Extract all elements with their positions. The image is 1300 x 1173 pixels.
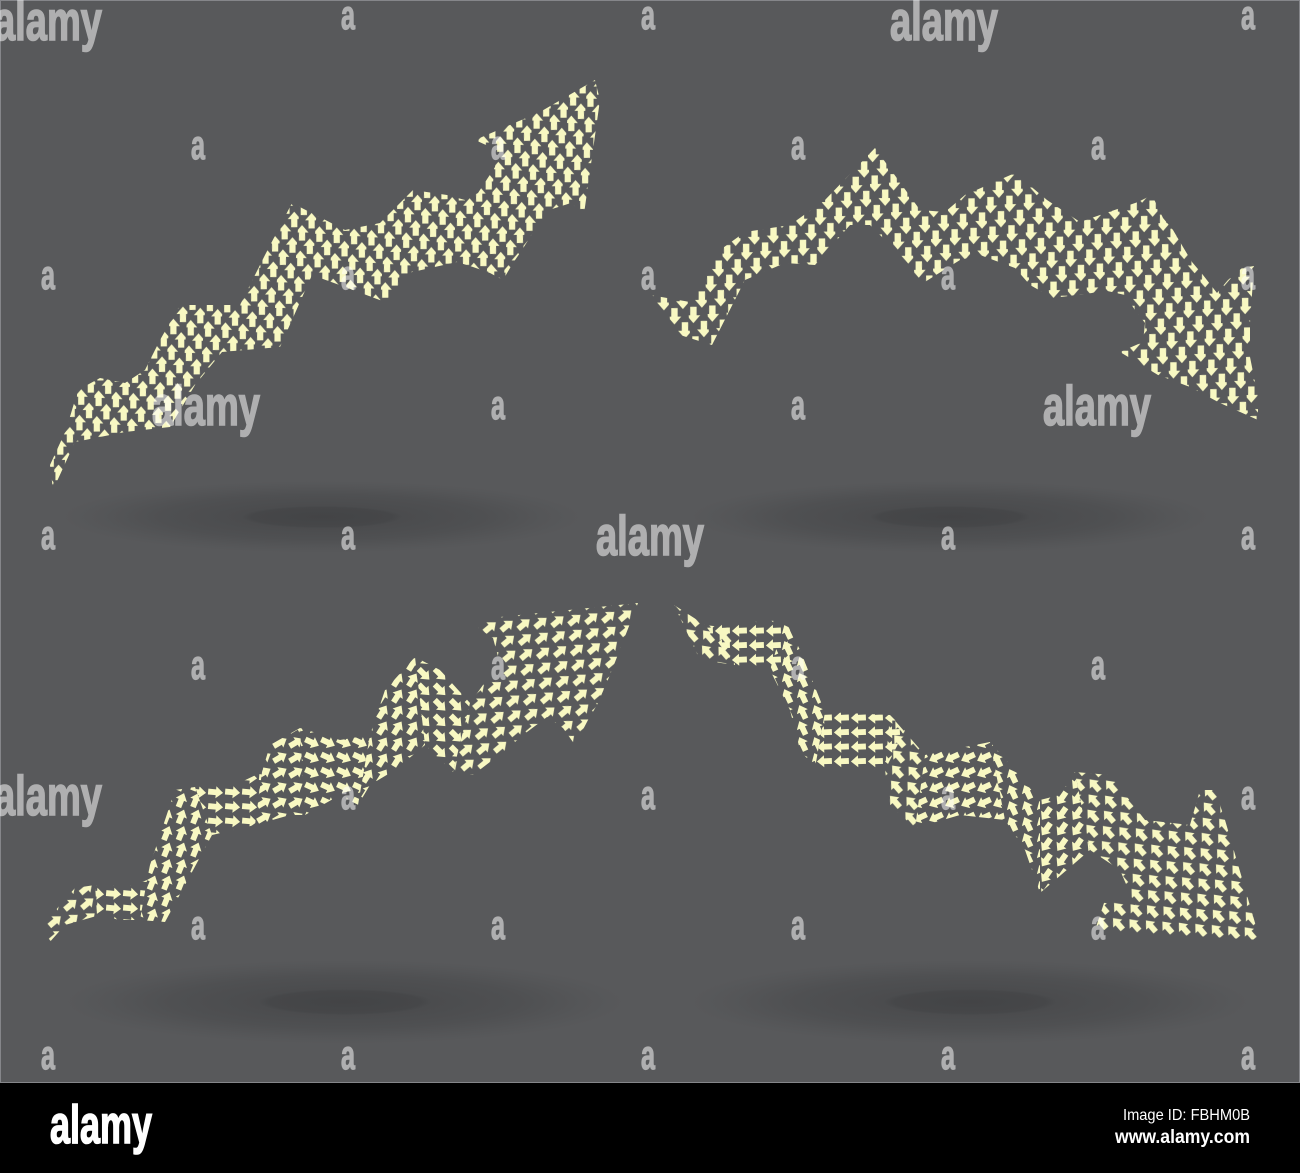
watermark: small a marks: a xyxy=(41,252,56,298)
watermark: small a marks: a xyxy=(341,252,356,298)
watermark: small a marks: a xyxy=(941,1032,956,1078)
watermark: small a marks: a xyxy=(1091,902,1106,948)
arrow chart: falling, down arrows xyxy=(650,148,1258,420)
watermark: small a marks: a xyxy=(491,122,506,168)
arrow chart: falling, diagonal arrows xyxy=(674,605,1260,940)
arrow chart: rising, diagonal arrows xyxy=(46,603,638,944)
watermark: small a marks: a xyxy=(491,382,506,428)
watermark: small a marks: a xyxy=(791,122,806,168)
watermark: small a marks: a xyxy=(41,512,56,558)
watermark: small a marks: a xyxy=(941,512,956,558)
watermark: small a marks: a xyxy=(941,772,956,818)
shadow: top left xyxy=(62,481,582,553)
watermark: small a marks: a xyxy=(491,902,506,948)
watermark: large alamy logos: alamy xyxy=(1043,374,1151,437)
watermark: small a marks: a xyxy=(341,772,356,818)
watermark: small a marks: a xyxy=(341,512,356,558)
watermark: small a marks: a xyxy=(191,902,206,948)
watermark: large alamy logos: alamy xyxy=(152,374,260,437)
shadow: top right xyxy=(690,481,1210,553)
watermark: small a marks: a xyxy=(1091,122,1106,168)
watermark: small a marks: a xyxy=(791,382,806,428)
watermark: small a marks: a xyxy=(1241,772,1256,818)
watermark: large alamy logos xyxy=(0,0,1151,827)
watermark: small a marks: a xyxy=(191,122,206,168)
watermark: small a marks: a xyxy=(791,642,806,688)
watermark: small a marks: a xyxy=(1241,252,1256,298)
website: www.alamy.com xyxy=(1114,1127,1250,1148)
watermark: small a marks: a xyxy=(641,1032,656,1078)
footer logo: alamy xyxy=(50,1095,152,1155)
watermark: small a marks: a xyxy=(641,772,656,818)
watermark: small a marks: a xyxy=(791,902,806,948)
watermark: small a marks: a xyxy=(1241,512,1256,558)
watermark: small a marks: a xyxy=(491,642,506,688)
footer bar xyxy=(0,1083,1300,1173)
watermark: small a marks: a xyxy=(41,1032,56,1078)
watermark: small a marks: a xyxy=(1091,642,1106,688)
shadow: bottom right xyxy=(690,960,1250,1044)
watermark: small a marks: a xyxy=(641,252,656,298)
arrow chart: rising, up arrows xyxy=(50,80,600,490)
watermark: small a marks: a xyxy=(1241,1032,1256,1078)
watermark: small a marks: a xyxy=(191,642,206,688)
image id: Image ID: FBHM0B xyxy=(1123,1107,1250,1124)
watermark: small a marks: a xyxy=(941,252,956,298)
watermark: small a marks: a xyxy=(341,1032,356,1078)
watermark: large alamy logos: alamy xyxy=(596,504,704,567)
shadow: bottom left xyxy=(65,960,625,1044)
